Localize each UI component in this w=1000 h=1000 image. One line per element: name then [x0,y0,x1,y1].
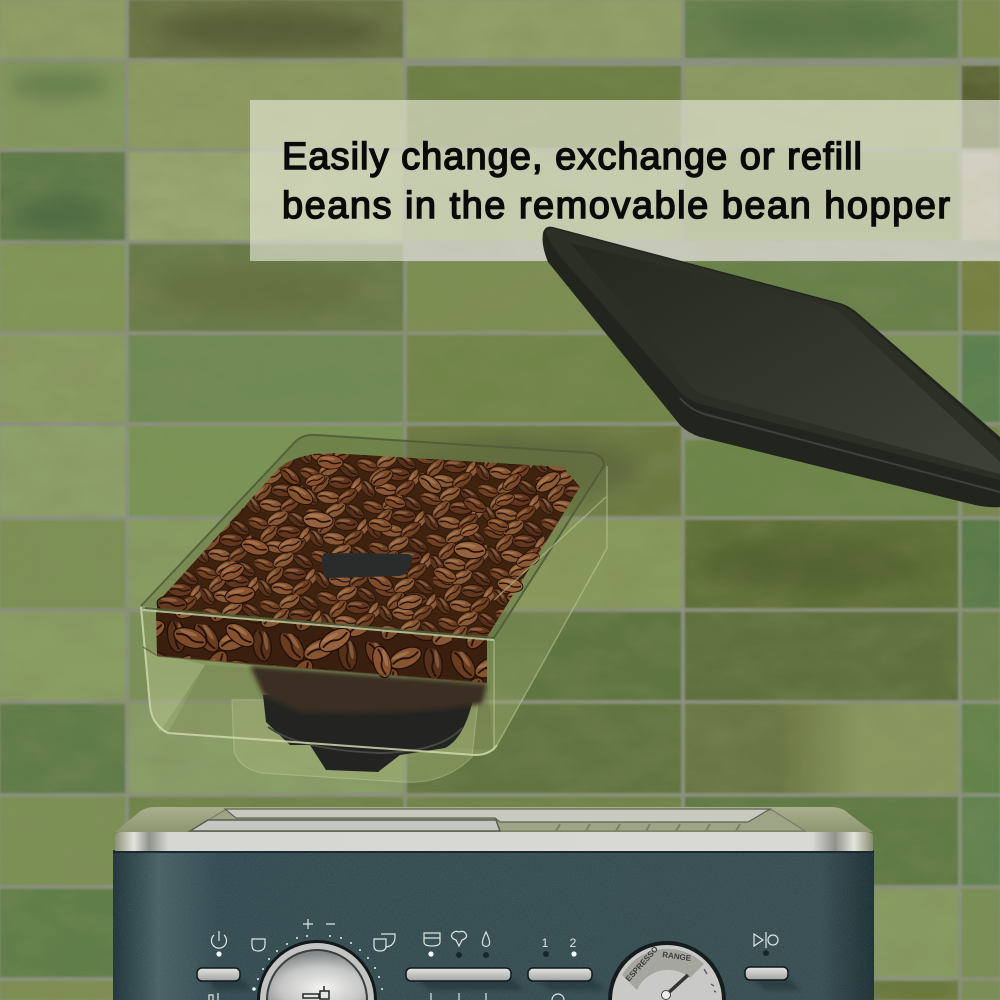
machine top tray [115,807,873,832]
icon: cancel [768,935,778,945]
indicator lights [216,950,769,958]
hopper rim and glass edges [141,435,607,755]
translucent caption panel [250,100,1000,261]
icon: cup with level [424,933,440,946]
espresso range gauge: RANGE [662,950,692,963]
hopper glass body [141,435,607,755]
body grain [113,850,874,1000]
icon: steam cloud [452,931,466,946]
button numbers: 2 [570,936,577,950]
bean hopper [141,435,607,782]
hopper lower cup and grinder mount [232,666,487,782]
icon: power [211,931,226,948]
silver band [115,832,873,852]
hopper lid [543,227,1000,507]
icon: play stop [754,932,766,948]
icon: single cup [252,939,265,951]
button numbers [542,936,577,950]
dial ticks [252,935,383,991]
buttons [197,967,788,981]
espresso range gauge [608,941,726,1000]
control labels and icons [211,919,778,951]
heading text: beans in the removable bean hopper [282,185,950,227]
shadow line [113,851,874,853]
icon: water drop [482,932,490,946]
lower row icons [209,993,564,1000]
heading text: Easily change, exchange or refill [282,136,862,178]
icon: double cup [374,934,395,951]
hopper interior tint [143,435,604,638]
coffee beans mass [156,453,580,683]
button shadows [205,978,800,990]
espresso range gauge: ESPRESSO [624,945,660,983]
heading text [282,136,950,227]
center pull tab [322,553,412,578]
selector dial [257,940,377,1000]
glass left corner reflection [145,650,205,732]
coffee machine [113,807,874,1000]
machine body [113,850,874,1000]
button numbers: 1 [542,936,549,950]
glass front face tint [168,665,494,750]
plus and minus [303,919,335,929]
